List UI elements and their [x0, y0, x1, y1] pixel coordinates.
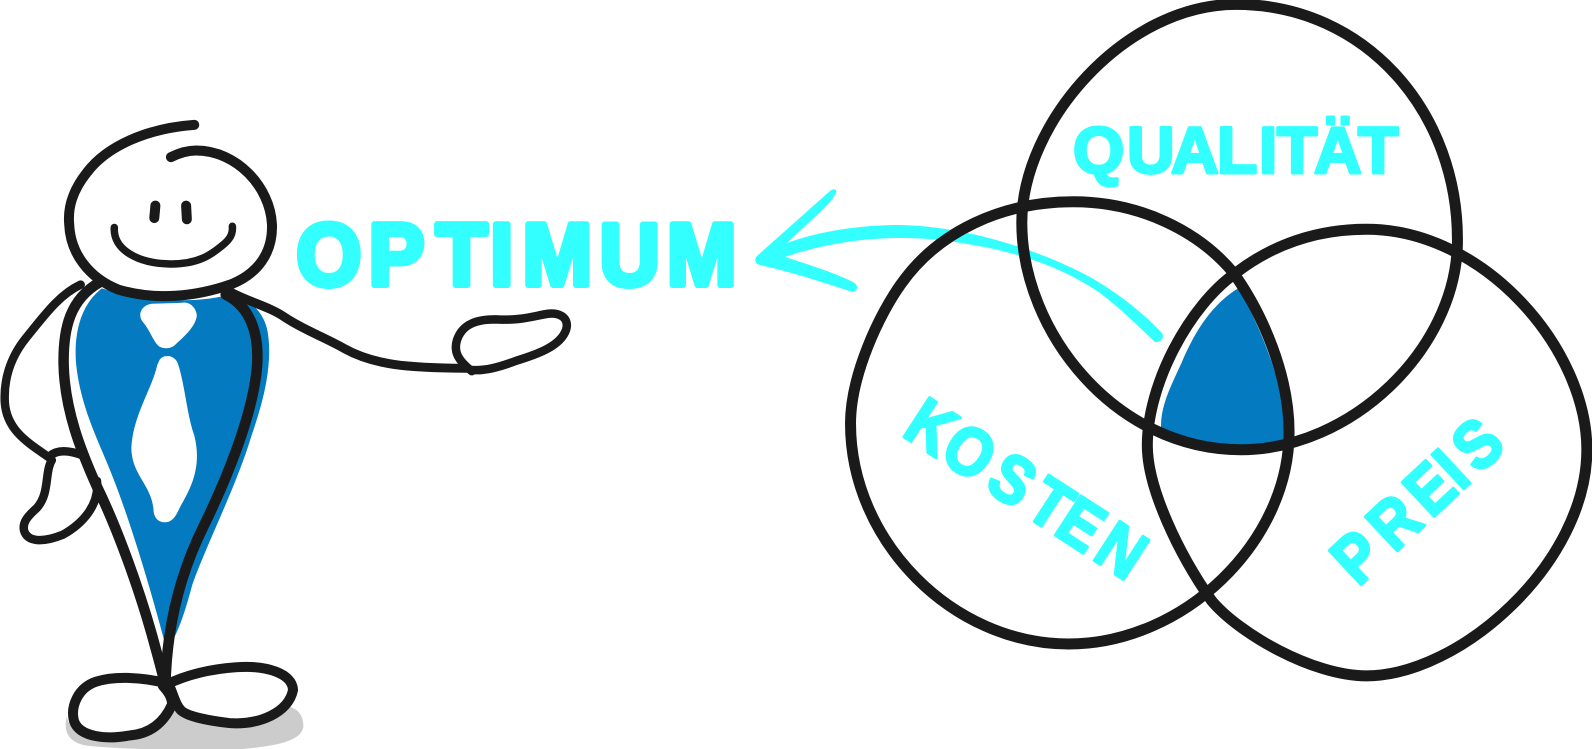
smile — [114, 226, 232, 264]
stick figure presenter — [5, 125, 567, 749]
circle: Qualität — [1022, 4, 1457, 450]
venn diagram — [851, 4, 1587, 676]
label: PREIS: PREIS — [1316, 403, 1518, 598]
cyan arrow pointing to OPTIMUM — [755, 189, 1163, 342]
blue suit — [76, 288, 269, 642]
white collar — [140, 302, 197, 348]
white tie — [131, 356, 197, 522]
label: KOSTEN: KOSTEN — [892, 383, 1161, 594]
feet — [73, 667, 293, 737]
left arm and hand — [5, 285, 97, 540]
head — [69, 125, 272, 296]
eyes — [154, 206, 187, 219]
body outline — [64, 282, 257, 688]
floor shadow — [66, 707, 303, 749]
circle: Preis — [1147, 229, 1587, 676]
label: QUALITÄT: QUALITÄT — [1073, 113, 1398, 187]
circle: Kosten — [851, 202, 1289, 644]
blue optimum intersection — [1161, 288, 1285, 447]
heading: OPTIMUM: OPTIMUM — [296, 206, 737, 304]
right arm and hand — [231, 293, 567, 371]
